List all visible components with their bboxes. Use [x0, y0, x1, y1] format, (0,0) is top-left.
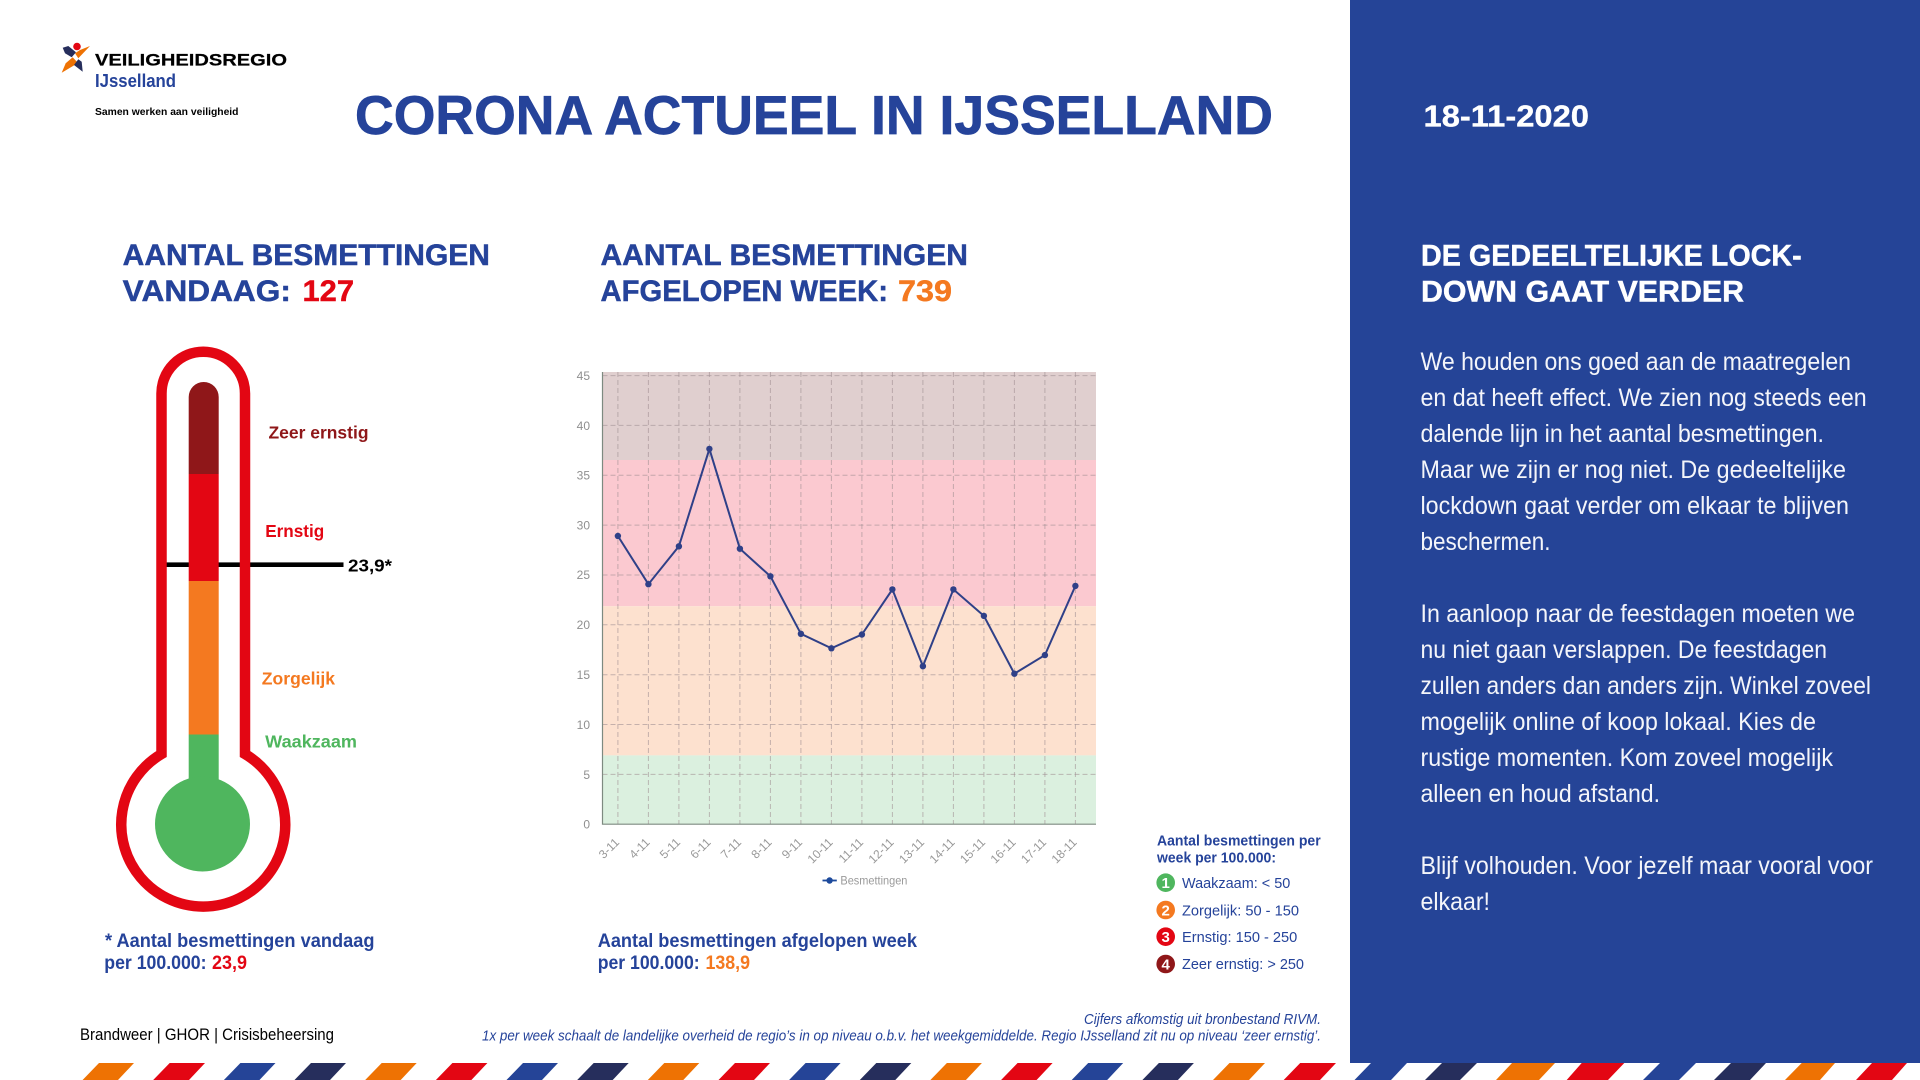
sidebar heading — [1421, 240, 1802, 309]
y axis labels: 15 — [577, 668, 590, 682]
footer organisations: Brandweer | GHOR | Crisisbeheersing — [80, 1025, 334, 1044]
y axis labels: 10 — [577, 718, 590, 732]
level labels: Ernstig — [265, 521, 324, 541]
sidebar body text: lockdown gaat verder om elkaar te blijven — [1420, 492, 1849, 520]
footnote: afgelopen week per 100.000: per 100.000: — [598, 953, 700, 974]
panel: right blue sidebar — [1350, 0, 1920, 1063]
x axis labels: 16-11 — [988, 835, 1019, 866]
x axis labels: 7-11 — [718, 835, 744, 861]
x axis labels: 4-11 — [626, 835, 653, 861]
chart legend: Besmettingen — [840, 874, 907, 888]
legend: niveaus per 100.000: week per 100.000: — [1156, 850, 1276, 866]
sidebar body text: Maar we zijn er nog niet. De gedeeltelijke — [1420, 456, 1846, 484]
sidebar body text — [1420, 348, 1873, 916]
y axis labels: 45 — [577, 369, 590, 383]
x axis labels: 15-11 — [957, 835, 988, 866]
footnote: afgelopen week per 100.000: 138,9 — [706, 953, 750, 974]
sidebar body text: alleen en houd afstand. — [1420, 780, 1660, 808]
source note — [482, 1012, 1321, 1044]
heading: besmettingen afgelopen week: 739 — [898, 275, 952, 308]
x axis labels: 17-11 — [1018, 835, 1049, 866]
legend item 4: 4 — [1162, 956, 1171, 973]
heading: besmettingen vandaag: 127 — [302, 275, 354, 308]
heading: besmettingen vandaag: VANDAAG: — [123, 275, 291, 308]
sidebar body text: beschermen. — [1420, 528, 1550, 556]
date: 18-11-2020 — [1424, 100, 1589, 134]
thermometer — [121, 352, 392, 907]
data line — [615, 446, 1079, 677]
y axis labels: 5 — [583, 768, 590, 782]
x axis labels: 3-11 — [596, 835, 622, 861]
x axis labels — [596, 835, 1080, 866]
logo: Veiligheidsregio IJsselland: Samen werken aan veiligheid — [95, 106, 238, 118]
sidebar body text: elkaar! — [1420, 888, 1490, 916]
sidebar body text: nu niet gaan verslappen. De feestdagen — [1420, 636, 1827, 664]
x axis labels: 13-11 — [896, 835, 927, 866]
sidebar body text: dalende lijn in het aantal besmettingen. — [1420, 420, 1824, 448]
level labels: Zorgelijk — [262, 668, 335, 688]
heading: besmettingen afgelopen week: AFGELOPEN WEEK: — [600, 275, 888, 308]
sidebar body text: In aanloop naar de feestdagen moeten we — [1420, 600, 1855, 628]
severity bands — [602, 372, 1096, 824]
sidebar body text: zullen anders dan anders zijn. Winkel zoveel — [1420, 672, 1871, 700]
heading: besmettingen afgelopen week: AANTAL BESMETTINGEN — [600, 239, 968, 272]
indicator line at 23,9 — [166, 562, 344, 567]
sidebar body text: mogelijk online of koop lokaal. Kies de — [1420, 708, 1816, 736]
x axis labels: 5-11 — [657, 835, 683, 861]
x axis labels: 9-11 — [779, 835, 805, 861]
heading: besmettingen vandaag — [123, 239, 490, 308]
y axis labels: 35 — [577, 468, 590, 482]
x axis labels: 10-11 — [805, 835, 836, 866]
logo: Veiligheidsregio IJsselland: VEILIGHEIDSREGIO — [95, 51, 287, 70]
footnote: vandaag per 100.000: 23,9 — [212, 953, 247, 974]
legend item 1: Waakzaam: < 50 — [1182, 875, 1290, 892]
level labels — [262, 422, 392, 752]
legend item 1: 1 — [1162, 875, 1170, 892]
heading: besmettingen afgelopen week — [600, 239, 968, 308]
x axis labels: 12-11 — [866, 835, 897, 866]
logo: Veiligheidsregio IJsselland — [62, 43, 287, 118]
legend item 2: Zorgelijk: 50 - 150 — [1182, 902, 1299, 919]
y axis labels: 25 — [577, 568, 590, 582]
level labels: Waakzaam — [265, 732, 357, 752]
thermometer column — [155, 382, 250, 872]
sidebar body text: We houden ons goed aan de maatregelen — [1420, 348, 1851, 376]
heading: besmettingen vandaag: AANTAL BESMETTINGEN — [123, 239, 490, 272]
logo: Veiligheidsregio IJsselland: IJsselland — [95, 70, 176, 91]
sidebar body text: rustige momenten. Kom zoveel mogelijk — [1420, 744, 1833, 772]
x axis labels: 6-11 — [687, 835, 714, 861]
y axis labels: 30 — [577, 518, 590, 532]
footnote: vandaag per 100.000: per 100.000: — [104, 953, 206, 974]
footnote: vandaag per 100.000: * Aantal besmettingen vandaag — [105, 931, 374, 952]
legend item 3: Ernstig: 150 - 250 — [1182, 929, 1297, 946]
x axis labels: 14-11 — [927, 835, 958, 866]
x axis labels: 8-11 — [748, 835, 775, 861]
line chart: besmettingen — [577, 369, 1096, 888]
footnote: vandaag per 100.000 — [104, 931, 375, 974]
y axis labels: 0 — [583, 818, 590, 832]
level labels: Zeer ernstig — [268, 422, 368, 442]
legend item 4: Zeer ernstig: > 250 — [1182, 956, 1304, 973]
legend item 2: 2 — [1162, 902, 1170, 919]
footnote: afgelopen week per 100.000: Aantal besmettingen afgelopen week — [598, 931, 917, 952]
icon: logo figure — [62, 43, 90, 73]
sidebar heading: DE GEDEELTELIJKE LOCK- — [1421, 240, 1802, 273]
legend item 3: 3 — [1162, 929, 1170, 946]
footer stripes — [83, 1063, 1907, 1080]
thermometer outline — [121, 352, 285, 907]
y axis labels: 40 — [577, 419, 590, 433]
source note: 1x per week schaalt de landelijke overheid de regio’s in op niveau o.b.v. het weekgemiddelde. Regio IJsselland zit nu op niveau ‘zeer ernstig’. — [482, 1028, 1321, 1044]
legend: niveaus per 100.000 — [1156, 833, 1321, 973]
x axis labels: 18-11 — [1049, 835, 1080, 866]
x axis labels: 11-11 — [836, 835, 866, 866]
y axis labels — [577, 369, 590, 832]
title: CORONA ACTUEEL IN IJSSELLAND — [355, 85, 1273, 146]
sidebar body text: Blijf volhouden. Voor jezelf maar vooral voor — [1420, 852, 1873, 880]
sidebar body text: en dat heeft effect. We zien nog steeds een — [1420, 384, 1867, 412]
legend: niveaus per 100.000: Aantal besmettingen per — [1157, 833, 1321, 849]
sidebar heading: DOWN GAAT VERDER — [1421, 276, 1744, 309]
level labels: 23,9* — [348, 556, 392, 576]
source note: Cijfers afkomstig uit bronbestand RIVM. — [1084, 1012, 1321, 1028]
footnote: afgelopen week per 100.000 — [598, 931, 917, 974]
y axis labels: 20 — [577, 618, 590, 632]
